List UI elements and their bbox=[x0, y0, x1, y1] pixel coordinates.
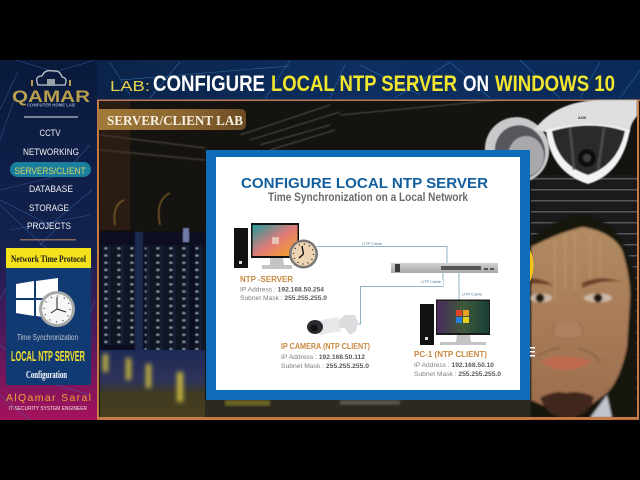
NTP server details: Subnet Mask : 255.255.255.0 bbox=[240, 295, 327, 302]
icon: wall clock bbox=[39, 291, 75, 327]
menu item: CCTV: CCTV bbox=[40, 128, 61, 139]
cable labels: UTP Cable bbox=[462, 292, 483, 296]
eyebrows bbox=[531, 278, 622, 288]
panel: network diagram card bbox=[206, 150, 530, 400]
yellow and white fragments bbox=[530, 250, 534, 282]
monitor bbox=[436, 300, 490, 335]
icon: network switch bbox=[391, 263, 498, 273]
title: WINDOWS 10 bbox=[495, 71, 615, 96]
dome camera bbox=[534, 100, 637, 184]
eyes bbox=[584, 294, 612, 302]
IP camera details: IP CAMERA (NTP CLIENT) bbox=[281, 342, 370, 351]
navigation menu bbox=[10, 116, 91, 240]
bullet camera bbox=[476, 108, 558, 192]
title: LAB: bbox=[110, 78, 150, 95]
IP camera details: IP Address : 192.168.50.112 bbox=[281, 354, 365, 361]
PC-1 details bbox=[414, 350, 501, 378]
orange border bbox=[98, 101, 638, 419]
menu item: servers/client highlighted: SERVERS/CLIENT bbox=[14, 166, 86, 177]
logo: Qamar computer home lab bbox=[12, 71, 90, 108]
menu item: NETWORKING: NETWORKING bbox=[23, 147, 79, 158]
icon: PC-1 computer bbox=[420, 300, 490, 345]
NTP server details: NTP -SERVER bbox=[240, 275, 293, 284]
panel: sidebar background bbox=[0, 60, 98, 420]
stand bbox=[440, 335, 486, 345]
menu item: PROJECTS: PROJECTS bbox=[27, 221, 71, 232]
NTP server details bbox=[240, 275, 327, 302]
cable labels: UTP Cable bbox=[421, 279, 442, 284]
mouth bbox=[541, 356, 592, 370]
photo: man's face bbox=[98, 101, 638, 419]
PC-1 details: IP Address : 192.168.50.10 bbox=[414, 362, 494, 369]
title: CONFIGURE bbox=[153, 71, 265, 96]
IP camera details: Subnet Mask : 255.255.255.0 bbox=[281, 363, 369, 370]
tower bbox=[420, 304, 434, 345]
menu item: DATABASE: DATABASE bbox=[29, 184, 73, 195]
badge: server/client lab: SERVER/CLIENT LAB bbox=[107, 113, 243, 128]
photo: security cameras bbox=[476, 100, 637, 192]
title bbox=[110, 71, 615, 96]
card heading: CONFIGURE LOCAL NTP SERVER bbox=[241, 176, 489, 192]
goatee bbox=[540, 392, 594, 418]
logo: Qamar computer home lab: COMPUTER HOME LAB bbox=[27, 102, 76, 108]
moustache bbox=[537, 348, 600, 362]
card subheading: Time Synchronization on a Local Network bbox=[268, 190, 468, 204]
title: LOCAL NTP SERVER bbox=[271, 71, 457, 96]
panel: sidebar promo: LOCAL NTP SERVER bbox=[11, 348, 85, 365]
icon: windows logo bbox=[16, 278, 58, 319]
icon: NTP server computer with clock bbox=[234, 223, 318, 269]
author role: IT-SECURITY SYSTEM ENGINEER bbox=[9, 406, 87, 412]
badge: server/client lab bbox=[98, 109, 246, 130]
text: configuration: Configuration bbox=[26, 369, 67, 381]
cable labels: UTP Cable bbox=[362, 241, 383, 246]
clock bbox=[289, 240, 318, 268]
panel: top banner bbox=[97, 60, 640, 100]
IP camera details bbox=[281, 342, 370, 370]
author name: AlQamar Saral bbox=[6, 392, 91, 404]
monitor bbox=[251, 223, 299, 258]
camera brand mark: AXIS bbox=[578, 116, 587, 120]
floor below card bbox=[205, 400, 531, 418]
PC-1 details: Subnet Mask : 255.255.255.0 bbox=[414, 371, 501, 378]
cable labels bbox=[362, 241, 483, 296]
data center racks bbox=[100, 193, 205, 357]
nose bbox=[553, 322, 583, 339]
icon: IP camera bbox=[307, 315, 358, 335]
floor reflections bbox=[100, 350, 205, 420]
tower bbox=[234, 228, 248, 268]
panel: sidebar promo bbox=[6, 248, 91, 385]
logo: Qamar computer home lab: QAMAR bbox=[12, 87, 90, 106]
panel: main photo background bbox=[97, 100, 640, 420]
colored windows logo bbox=[456, 310, 469, 323]
NTP server details: IP Address : 192.168.50.254 bbox=[240, 286, 324, 294]
PC-1 details: PC-1 (NTP CLIENT) bbox=[414, 350, 487, 359]
network cables bbox=[317, 246, 459, 324]
title: ON bbox=[463, 71, 489, 96]
text: time synchronization: Time Synchronization bbox=[17, 333, 78, 342]
stand bbox=[262, 258, 292, 269]
yellow heading: Network Time Protocol: Network Time Protocol bbox=[11, 255, 86, 265]
menu item: STORAGE: STORAGE bbox=[29, 203, 69, 214]
cloud icon bbox=[37, 71, 66, 85]
